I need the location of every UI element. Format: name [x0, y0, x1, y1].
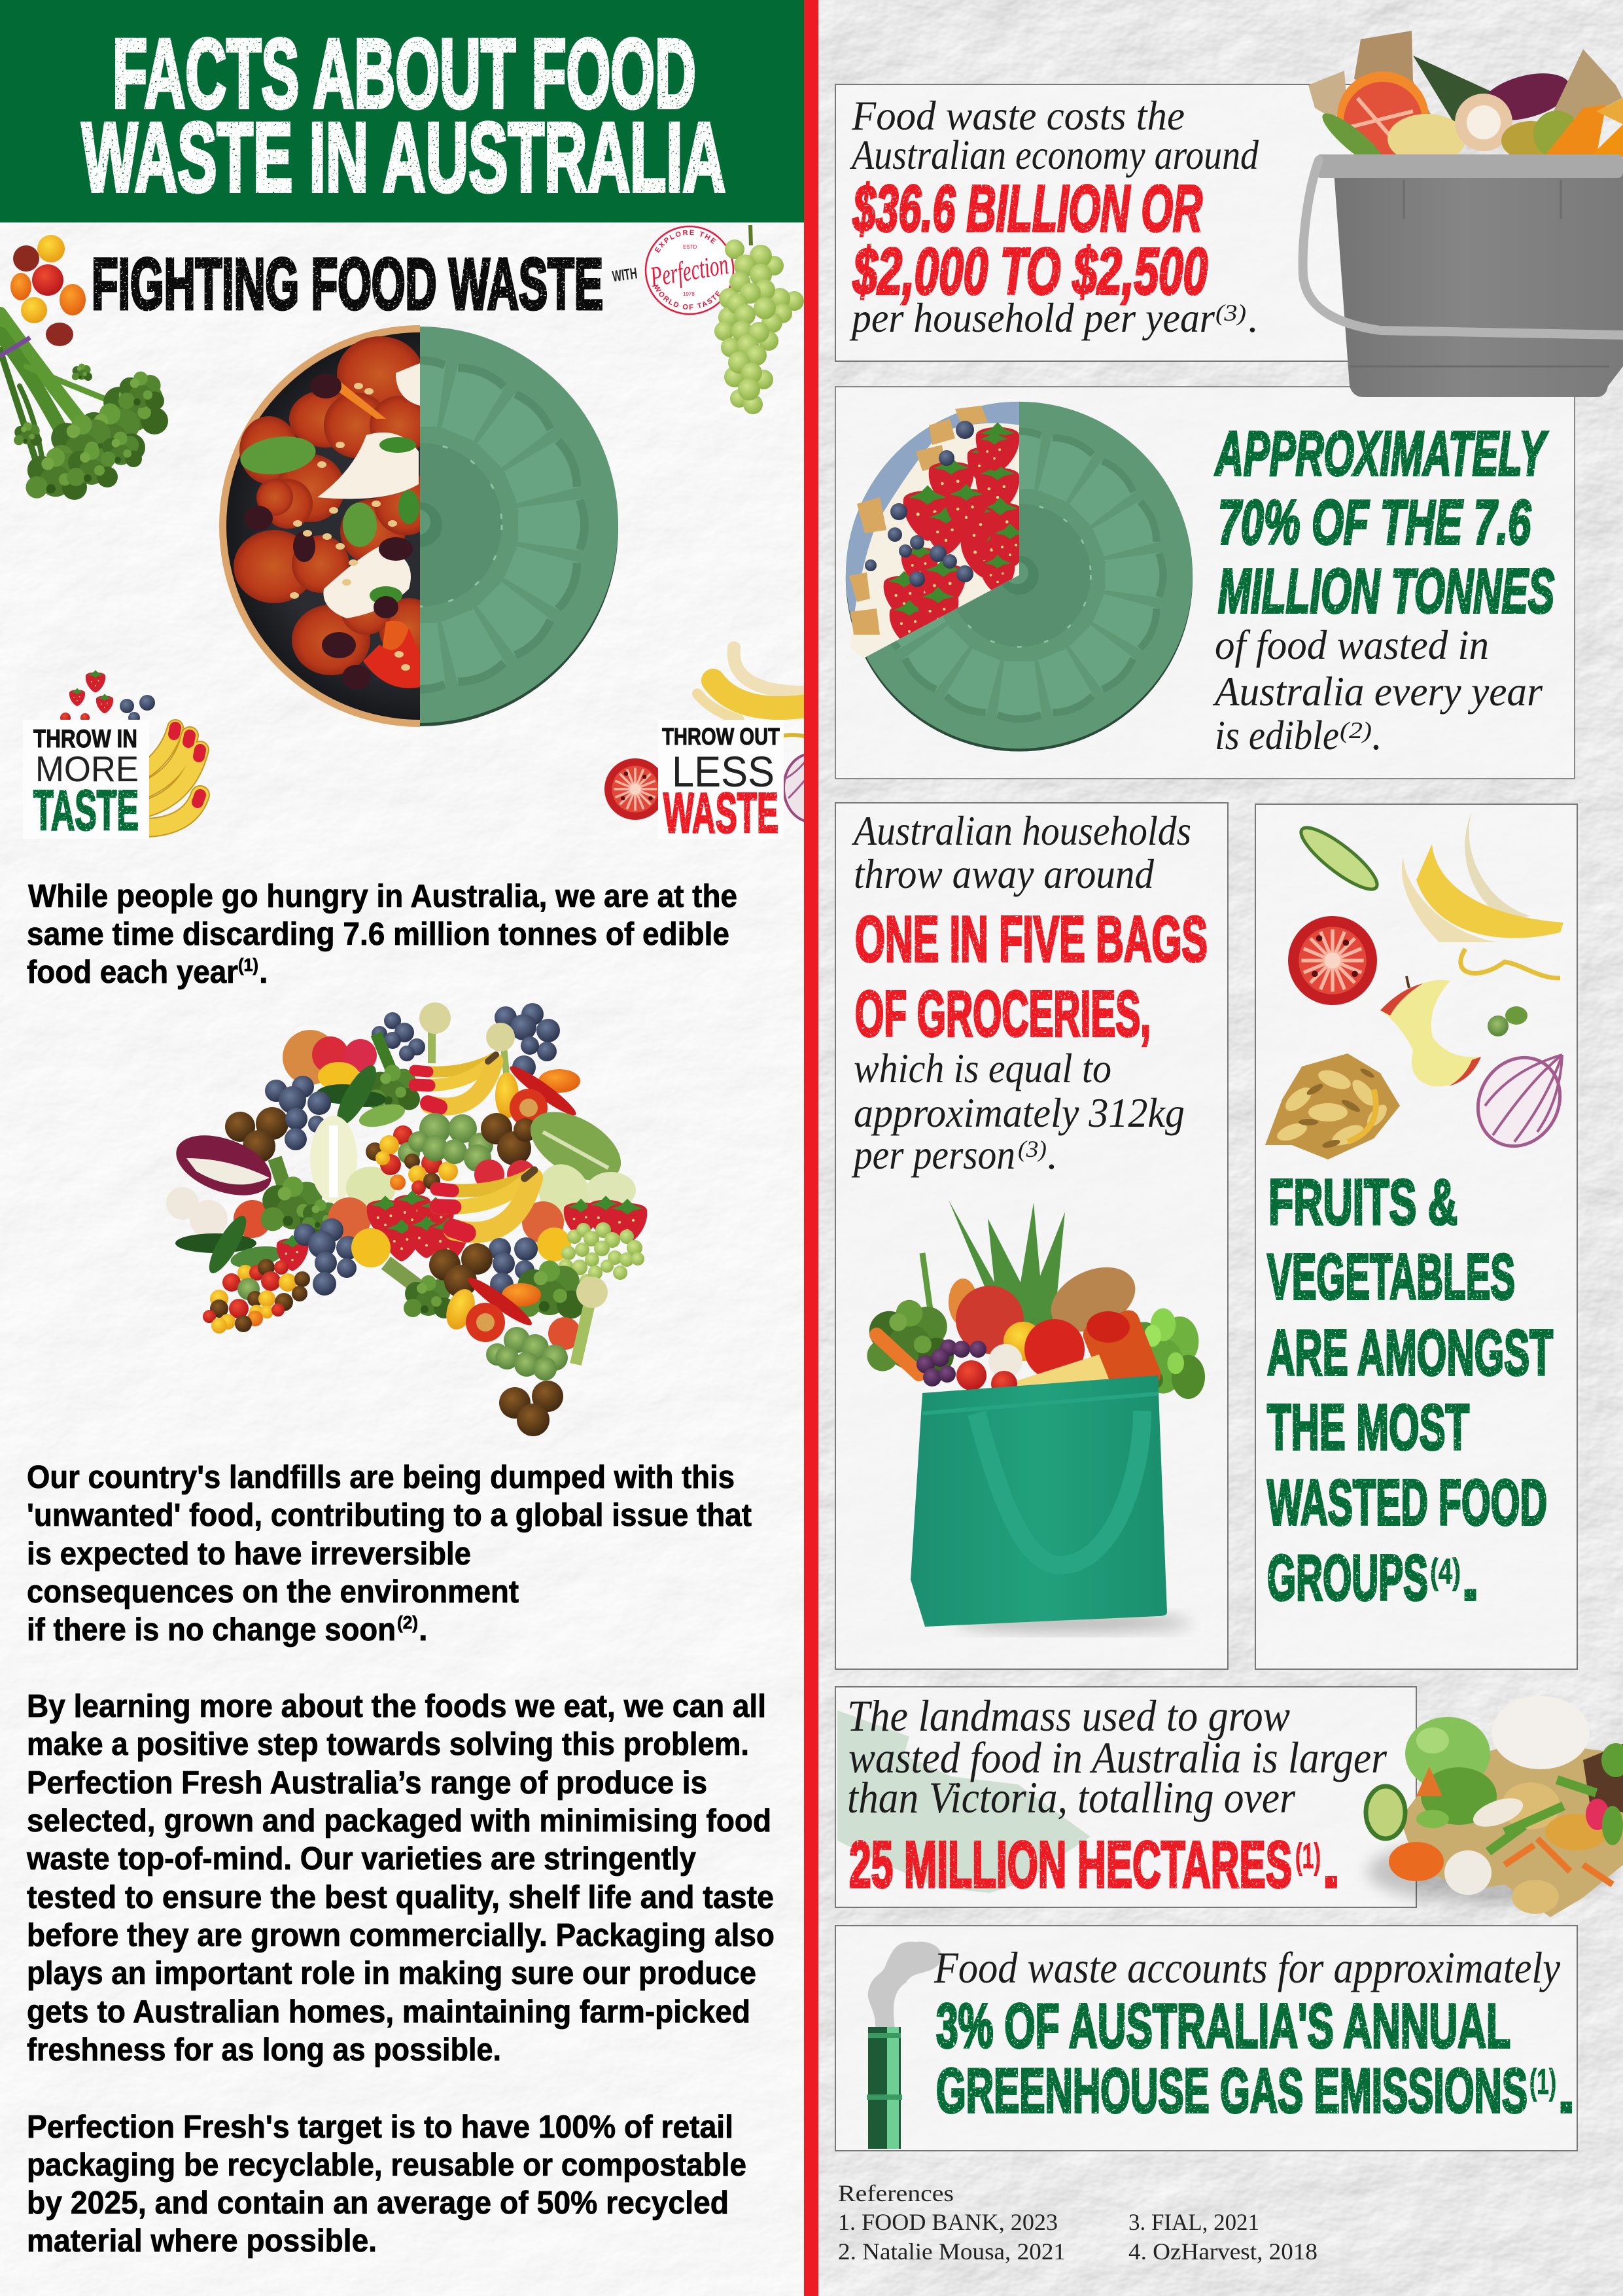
icon: green grapes	[714, 225, 804, 414]
icon: cucumber slice	[1294, 819, 1384, 898]
panel: cost of food waste	[835, 84, 1372, 361]
icon: perfection logo stamp: WORLD OF TASTE	[654, 284, 721, 310]
heading: fruits and vegetables: FRUITS &	[1268, 1166, 1457, 1238]
title text: WASTE IN AUSTRALIA	[82, 102, 725, 212]
text block: landfills: .	[419, 1612, 428, 1648]
icon: onion	[784, 754, 839, 822]
text block: landfills	[27, 1460, 752, 1648]
icon: tomato slice	[1288, 916, 1377, 1005]
panel: one in five bags: throw away around	[854, 851, 1155, 897]
text block: intro	[27, 879, 737, 990]
heading: 25 million hectares: .	[1322, 1828, 1340, 1901]
plate and bin lid illustration	[219, 325, 621, 727]
red vertical divider	[804, 0, 818, 2296]
text block: intro: .	[259, 955, 268, 990]
bin body	[1334, 171, 1623, 397]
panel: greenhouse gas emissions	[835, 1926, 1577, 2151]
text block: learning: tested to ensure the best quality, shelf life and taste	[27, 1880, 774, 1915]
panel: one in five bags: (3)	[1018, 1136, 1047, 1162]
icon: cherry tomatoes	[10, 235, 86, 346]
heading: fruits and vegetables: .	[1461, 1542, 1479, 1614]
background: right plaster wall	[811, 0, 1623, 2296]
cost figures	[852, 172, 1208, 308]
panel: cost of food waste: .	[1248, 294, 1259, 341]
heading: 3 percent	[936, 1991, 1575, 2126]
heading: one in five bags: OF GROCERIES,	[855, 978, 1151, 1050]
references: 1. FOOD BANK, 2023	[838, 2209, 1058, 2235]
icon: banana peel	[697, 648, 811, 738]
text block: learning: gets to Australian homes, maintaining farm-picked	[27, 1994, 750, 2030]
text block: learning: plays an important role in making sure our produce	[27, 1956, 756, 1991]
heading: 25 million hectares	[849, 1828, 1340, 1901]
icon: red tipped bananas	[147, 728, 200, 828]
text block: target: packaging be recyclable, reusable or compostable	[27, 2147, 746, 2183]
panel: cost of food waste: Australian economy around	[850, 132, 1259, 178]
title text: FACTS ABOUT FOOD	[113, 18, 696, 128]
panel: cost of food waste: per household per year	[849, 294, 1215, 341]
icon: banana peel	[1402, 811, 1563, 978]
panel: one in five bags: per person	[851, 1131, 1015, 1178]
text block: learning: freshness for as long as possible.	[27, 2032, 501, 2068]
heading: one in five bags: ONE IN FIVE BAGS	[855, 903, 1208, 975]
icon: brussels sprout leaf	[1505, 1006, 1527, 1025]
panel: 70 percent edible: of food wasted in	[1215, 622, 1489, 668]
text block: landfills: if there is no change soon	[27, 1612, 396, 1648]
text block: intro: (1)	[238, 955, 258, 975]
text block: intro: same time discarding 7.6 million tonnes of edible	[27, 917, 729, 952]
panel: most wasted food groups	[1255, 804, 1577, 1669]
panel: 70 percent edible: .	[1372, 712, 1382, 758]
map: victoria silhouette	[837, 1710, 1091, 1893]
bin handle	[1303, 160, 1623, 335]
text block: learning: Perfection Fresh Australia’s range of produce is	[27, 1765, 707, 1801]
text block: landfills: 'unwanted' food, contributing to a global issue that	[27, 1498, 752, 1533]
icon: tomato slice	[604, 758, 666, 820]
throw out less waste badge	[604, 641, 804, 835]
panel: one in five bags: Australian households	[851, 807, 1191, 854]
icon: smoke stack	[867, 1941, 941, 2149]
panel: cost of food waste: (3)	[1215, 300, 1246, 326]
throw in more taste badge: TASTE	[33, 779, 139, 842]
icon: perfection logo stamp: EXPLORE THE	[654, 230, 716, 253]
icon: apple core	[1380, 976, 1481, 1086]
panel: landmass larger than victoria: The landmass used to grow	[847, 1691, 1290, 1740]
cost figures: $2,000 TO $2,500	[852, 235, 1208, 308]
text block: landfills: (2)	[397, 1612, 418, 1633]
panel: cost of food waste: Food waste costs the	[851, 92, 1185, 139]
throw in more taste badge: MORE	[35, 749, 139, 789]
heading: fruits and vegetables: THE MOST	[1267, 1391, 1469, 1463]
throw in more taste badge: THROW IN	[33, 725, 137, 753]
references: 4. OzHarvest, 2018	[1128, 2238, 1318, 2265]
panel: landmass larger than victoria: wasted food in Australia is larger	[848, 1733, 1387, 1782]
text block: target: material where possible.	[27, 2223, 377, 2259]
panel: 70 percent edible	[835, 387, 1575, 779]
food scraps	[1308, 31, 1623, 175]
throw out less waste badge: THROW OUT	[662, 723, 780, 750]
icon: grocery bag	[867, 1200, 1205, 1632]
south east produce	[386, 1243, 608, 1381]
panel: landmass larger than victoria	[835, 1687, 1416, 1907]
panel: one in five bags: approximately 312kg	[854, 1089, 1185, 1136]
heading: fruits and vegetables: (4)	[1430, 1551, 1461, 1591]
icon: potato peels	[1265, 1053, 1400, 1159]
title banner	[0, 0, 804, 222]
panel: one in five bags	[835, 803, 1228, 1669]
heading: approximately 70 percent	[1215, 419, 1554, 626]
text block: target	[27, 2110, 746, 2259]
text block: landfills: Our country's landfills are being dumped with this	[27, 1460, 735, 1495]
icon: red onion	[1462, 1042, 1576, 1161]
illustration: australia map made of produce	[166, 1002, 647, 1436]
text block: target: Perfection Fresh's target is to have 100% of retail	[27, 2110, 733, 2145]
text block: learning: before they are grown commercially. Packaging also	[27, 1918, 775, 1953]
throw out less waste badge: WASTE	[663, 782, 778, 845]
panel: landmass larger than victoria: than Victoria, totalling over	[847, 1773, 1295, 1822]
text block: learning: make a positive step towards solving this problem.	[27, 1727, 749, 1762]
text block: intro: food each year	[27, 955, 238, 990]
references: 3. FIAL, 2021	[1128, 2209, 1259, 2235]
central produce	[294, 1098, 647, 1296]
tasmania tomatoes	[499, 1381, 563, 1436]
title text	[82, 18, 725, 212]
text block: learning: selected, grown and packaged with minimising food	[27, 1803, 771, 1839]
text block: landfills: is expected to have irreversible	[27, 1536, 471, 1572]
references	[838, 2180, 1318, 2265]
panel: 70 percent edible: is edible	[1215, 712, 1339, 758]
subheading: fighting food waste	[92, 244, 638, 325]
west produce	[166, 1076, 396, 1333]
heading: 25 million hectares: 25 MILLION HECTARES	[849, 1828, 1292, 1901]
half bin lid	[420, 327, 618, 726]
heading: 3 percent: .	[1558, 2056, 1575, 2126]
icon: perfection logo stamp	[645, 225, 734, 315]
throw out less waste badge: LESS	[672, 747, 775, 796]
plate of roasted tomatoes	[219, 325, 420, 727]
top produce	[283, 1002, 580, 1131]
text block: landfills: consequences on the environment	[27, 1574, 519, 1610]
icon: berries	[60, 670, 155, 724]
text block: learning	[26, 1689, 775, 2068]
references: References	[838, 2180, 954, 2206]
throw in more taste badge	[23, 670, 200, 842]
heading: fruits and vegetables	[1267, 1166, 1553, 1614]
references: 2. Natalie Mousa, 2021	[838, 2238, 1066, 2265]
heading: one in five bags	[855, 903, 1208, 1050]
icon: broccolini	[0, 314, 168, 500]
icon: food waste pile	[1366, 1696, 1623, 1917]
heading: fruits and vegetables: GROUPS	[1267, 1542, 1428, 1614]
text block: intro: While people go hungry in Australia, we are at the	[28, 879, 737, 914]
panel: one in five bags: .	[1047, 1131, 1058, 1178]
heading: 3 percent: (1)	[1529, 2061, 1556, 2102]
icon: perfection logo stamp: Perfection	[648, 248, 731, 293]
icon: perfection logo stamp: 1978	[683, 291, 695, 297]
panel: greenhouse gas emissions: Food waste accounts for approximately	[934, 1943, 1561, 1992]
background: left plaster wall	[0, 0, 811, 2296]
icon: compost bin with food scraps	[1303, 31, 1623, 397]
text block: target: by 2025, and contain an average of 50% recycled	[27, 2185, 729, 2221]
panel: one in five bags: which is equal to	[854, 1045, 1111, 1091]
panel: 70 percent edible: (2)	[1340, 717, 1372, 743]
heading: 25 million hectares: (1)	[1295, 1835, 1321, 1876]
subheading: fighting food waste: FIGHTING FOOD WASTE	[92, 244, 603, 325]
lid pie chart with food sector	[846, 402, 1193, 751]
subheading: fighting food waste: WITH	[611, 264, 638, 286]
cost figures: $36.6 BILLION OR	[852, 172, 1202, 245]
panel: 70 percent edible: Australia every year	[1212, 668, 1543, 715]
text block: learning: By learning more about the foods we eat, we can all	[27, 1689, 766, 1724]
icon: brussels sprout	[1488, 1016, 1509, 1036]
icon: perfection logo stamp: ESTD	[683, 244, 697, 250]
text block: learning: waste top-of-mind. Our varieties are stringently	[26, 1841, 696, 1877]
